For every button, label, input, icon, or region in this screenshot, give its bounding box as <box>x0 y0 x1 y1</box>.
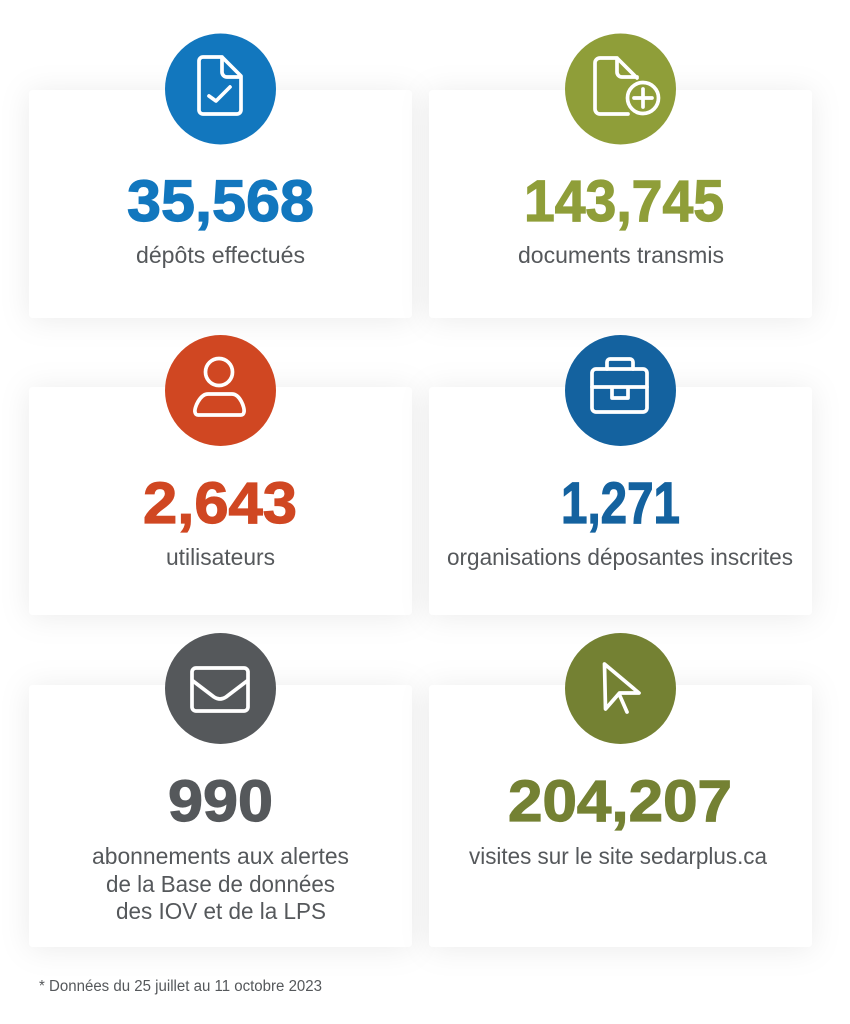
number: 990: 990 <box>168 769 273 834</box>
number: 1,271: 1,271 <box>561 471 680 536</box>
label: abonnements aux alertes: abonnements aux alertes <box>92 843 349 869</box>
panel: abonnements aux alertes <box>29 633 412 947</box>
label: dépôts effectués: dépôts effectués <box>136 242 305 268</box>
icon: envelope <box>165 633 276 744</box>
panel: documents transmis <box>429 34 812 318</box>
label: utilisateurs: utilisateurs <box>166 544 275 570</box>
icon: user <box>165 335 276 446</box>
card background <box>429 387 812 615</box>
card background <box>429 685 812 947</box>
panel: organisations déposantes inscrites <box>429 335 812 615</box>
label: abonnements aux alertes <box>92 843 349 924</box>
card background <box>29 90 412 318</box>
card background <box>29 685 412 947</box>
footnote: * Données du 25 juillet au 11 octobre 2023 <box>39 978 322 995</box>
number: 204,207: 204,207 <box>508 769 732 834</box>
card background <box>429 90 812 318</box>
panel: visites sur le site <box>429 633 812 947</box>
number: 35,568: 35,568 <box>127 169 314 234</box>
icon: mouse cursor <box>565 633 676 744</box>
icon: document with check mark <box>165 34 276 144</box>
number: 143,745: 143,745 <box>524 169 724 234</box>
icon: document with plus sign <box>565 34 676 144</box>
label: abonnements aux alertes: des IOV et de la LPS <box>116 898 326 924</box>
number: 2,643: 2,643 <box>143 471 297 536</box>
label: documents transmis: documents transmis <box>518 242 724 268</box>
label: abonnements aux alertes: de la Base de données <box>106 871 335 897</box>
label: organisations déposantes inscrites: organisations déposantes inscrites <box>447 544 793 570</box>
panel: dépôts effectués <box>29 34 412 318</box>
label: visites sur le site sedarplus.ca: visites sur le site sedarplus.ca <box>469 843 767 869</box>
icon: briefcase <box>565 335 676 446</box>
card background <box>29 387 412 615</box>
panel: utilisateurs <box>29 335 412 615</box>
